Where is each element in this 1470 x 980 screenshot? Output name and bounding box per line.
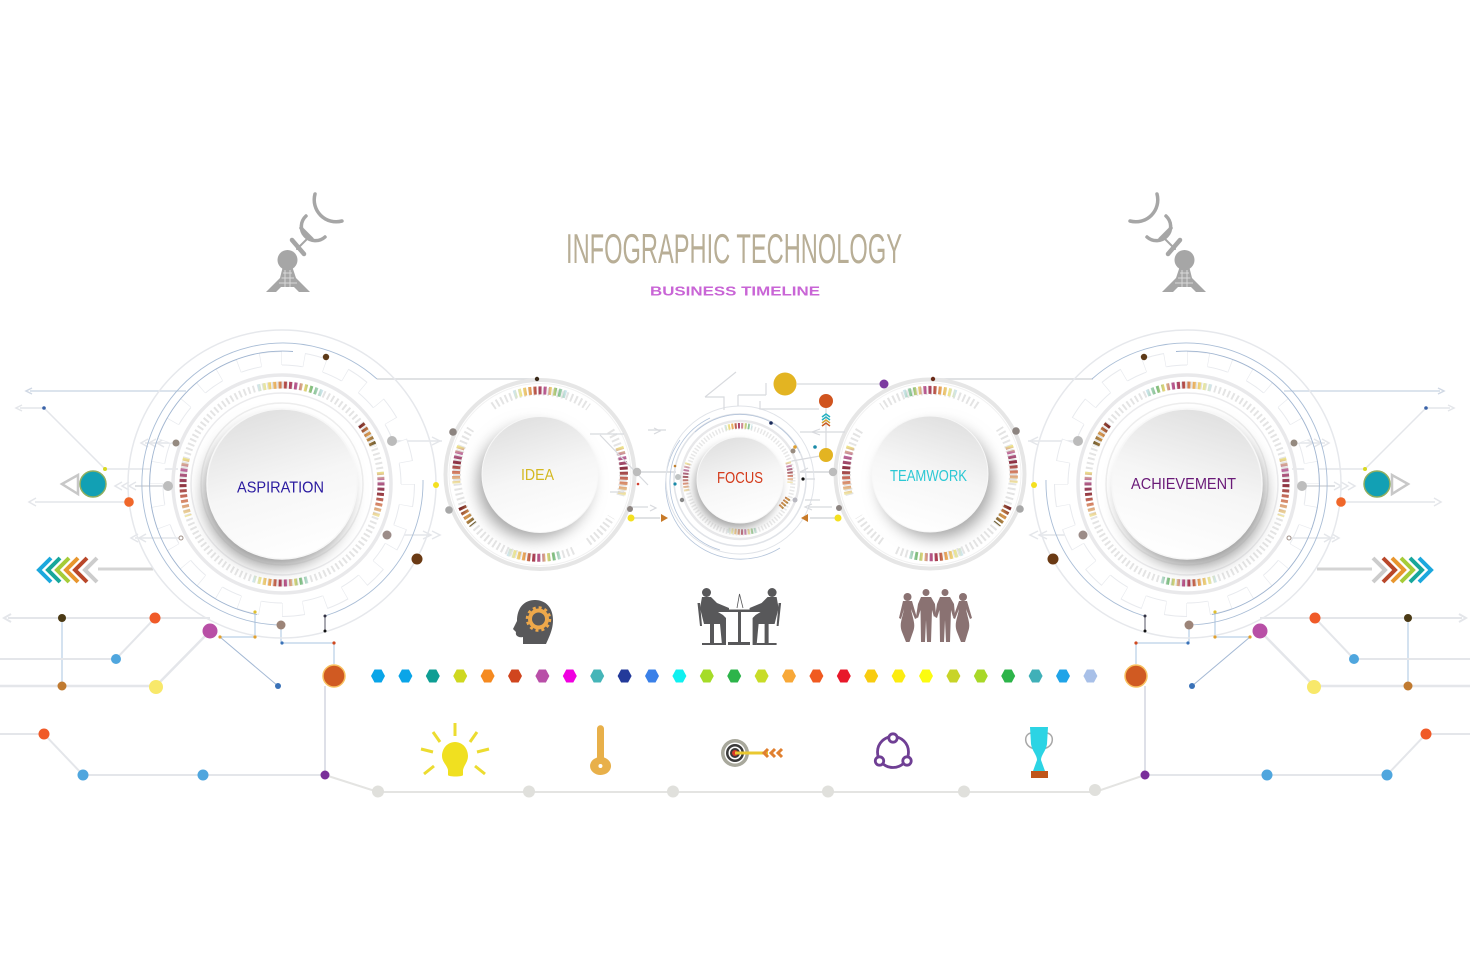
label: focus: FOCUS (717, 470, 763, 487)
icon: key (590, 725, 611, 775)
bottom timeline track (325, 775, 1145, 798)
rear connecting lines between dials (377, 379, 1093, 518)
right circuit lines (1028, 388, 1470, 775)
icon: share circle (875, 734, 911, 768)
label: achievement: ACHIEVEMENT (1131, 476, 1236, 493)
subtitle: BUSINESS TIMELINE (650, 284, 820, 298)
hexagon timeline row (371, 670, 1097, 682)
left circuit nodes and arrows (38, 354, 439, 780)
icon: target and arrow (721, 739, 782, 767)
icon: team of four (899, 589, 972, 642)
icon: right antenna (1130, 194, 1206, 292)
right circuit nodes and arrows (1031, 354, 1432, 780)
dial: idea (446, 380, 634, 569)
dial: achievement (1033, 330, 1341, 638)
left circuit lines (0, 388, 442, 775)
icon: trophy (1026, 727, 1052, 778)
icon: light bulb (421, 723, 489, 776)
focus circuit nodes (445, 372, 1024, 522)
icon: left antenna (266, 194, 342, 292)
dial: teamwork (836, 380, 1024, 568)
icon: meeting at table (698, 588, 781, 645)
dial: aspiration (128, 330, 436, 638)
icon: head with gear (513, 600, 553, 644)
label: aspiration: ASPIRATION (237, 480, 324, 496)
title: INFOGRAPHIC TECHNOLOGY (566, 225, 902, 272)
label: teamwork: TEAMWORK (890, 468, 967, 485)
label: idea: IDEA (521, 467, 554, 484)
dial: focus (666, 406, 814, 559)
